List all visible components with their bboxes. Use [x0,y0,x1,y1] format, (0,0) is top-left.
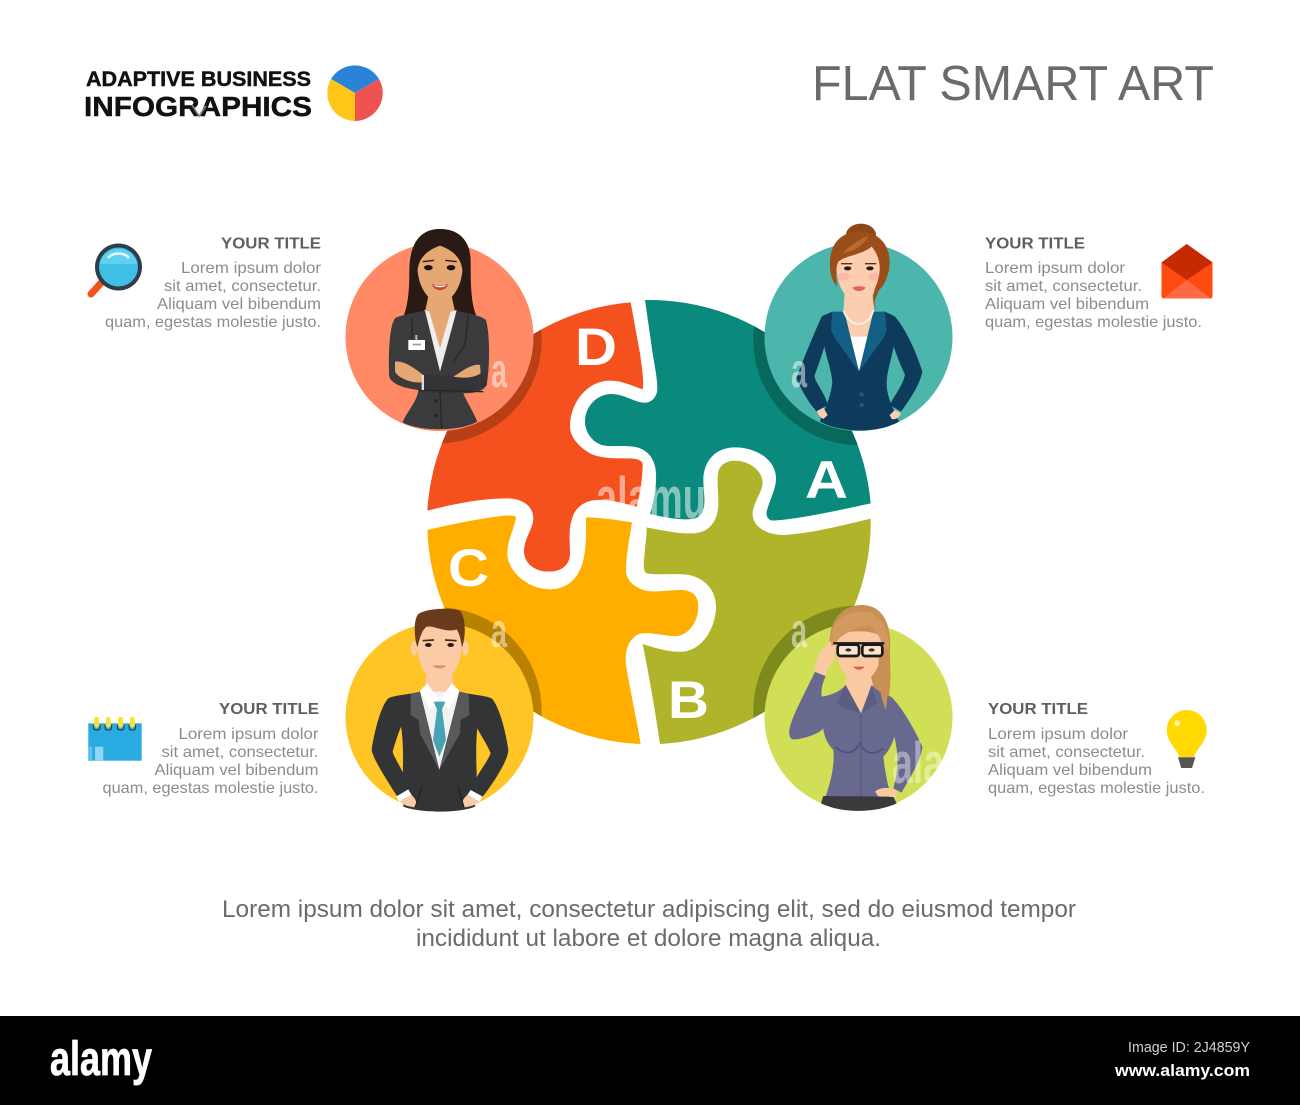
text block: top right: Lorem ipsum dolor [985,260,1126,277]
text block: top right: Aliquam vel bibendum [985,296,1149,313]
puzzle piece D [427,302,644,572]
letters: D [575,318,617,377]
footer caption: Lorem ipsum dolor sit amet, consectetur adipiscing elit, sed do eiusmod tempor [222,896,1076,923]
logo text: ADAPTIVE BUSINESS [86,68,311,91]
icon: notebook [88,717,142,761]
puzzle piece A [585,300,871,521]
title: FLAT SMART ART [812,57,1214,111]
alamy footer band: alamy [50,1033,152,1086]
puzzle piece C [427,515,698,744]
text block: top left: Aliquam vel bibendum [157,296,321,313]
text block: bottom left: Lorem ipsum dolor [178,726,319,743]
text block: top right: sit amet, consectetur. [985,278,1142,295]
watermark: a [491,345,507,398]
icon: logo pie chart [327,65,383,121]
person B: businesswoman with glasses [789,605,922,811]
watermark: alamu [596,466,706,531]
text block: top left [105,236,322,331]
watermark [192,105,944,796]
person circle D [346,243,534,431]
text block: bottom right: sit amet, consectetur. [988,744,1145,761]
letters [448,318,848,730]
text block: top left: quam, egestas molestie justo. [105,314,321,331]
logo text: INFOGRAPHICS [84,91,312,122]
letters: B [668,671,709,730]
person A: businesswoman in navy suit [797,224,922,430]
text block: top left: sit amet, consectetur. [164,278,321,295]
text block: top right [985,236,1202,331]
footer caption [222,896,1076,952]
watermark: a [491,605,507,658]
text block: bottom right: Lorem ipsum dolor [988,726,1129,743]
icon: envelope [1162,244,1212,298]
letters: C [448,539,489,598]
text block: bottom left: Aliquam vel bibendum [154,762,318,779]
alamy footer band: Image ID: 2J4859Y [1128,1039,1250,1056]
alamy footer band: www.alamy.com [1114,1061,1250,1080]
person circle A [764,243,952,431]
person C: businessman with teal tie [372,609,508,812]
footer caption: incididunt ut labore et dolore magna aliqua. [416,925,881,952]
text block: bottom left: quam, egestas molestie justo. [102,780,318,797]
puzzle chart [335,235,963,816]
watermark: a [791,345,807,398]
puzzle piece B [642,460,871,744]
text block: bottom right: YOUR TITLE [988,701,1088,718]
text block: bottom right: Aliquam vel bibendum [988,762,1152,779]
person circle C [346,623,534,811]
text block: top right: YOUR TITLE [985,236,1085,252]
letters: A [805,451,848,510]
text block: bottom left: sit amet, consectetur. [162,744,318,761]
text block: top left: Lorem ipsum dolor [181,260,322,277]
text block: bottom right: quam, egestas molestie justo. [988,780,1205,797]
person D: businesswoman with crossed arms [389,229,489,429]
person circle B [764,623,952,811]
logo text [84,68,312,122]
icon: magnifier [91,244,142,294]
text block: bottom right [988,701,1205,797]
icon: light bulb [1167,710,1207,768]
watermark: a [791,605,807,658]
watermark: ala [892,731,944,796]
text block: bottom left [102,701,319,797]
text block: bottom left: YOUR TITLE [219,701,319,718]
text block: top right: quam, egestas molestie justo. [985,314,1202,331]
text block: top left: YOUR TITLE [221,236,321,252]
alamy footer band [0,1016,1300,1105]
